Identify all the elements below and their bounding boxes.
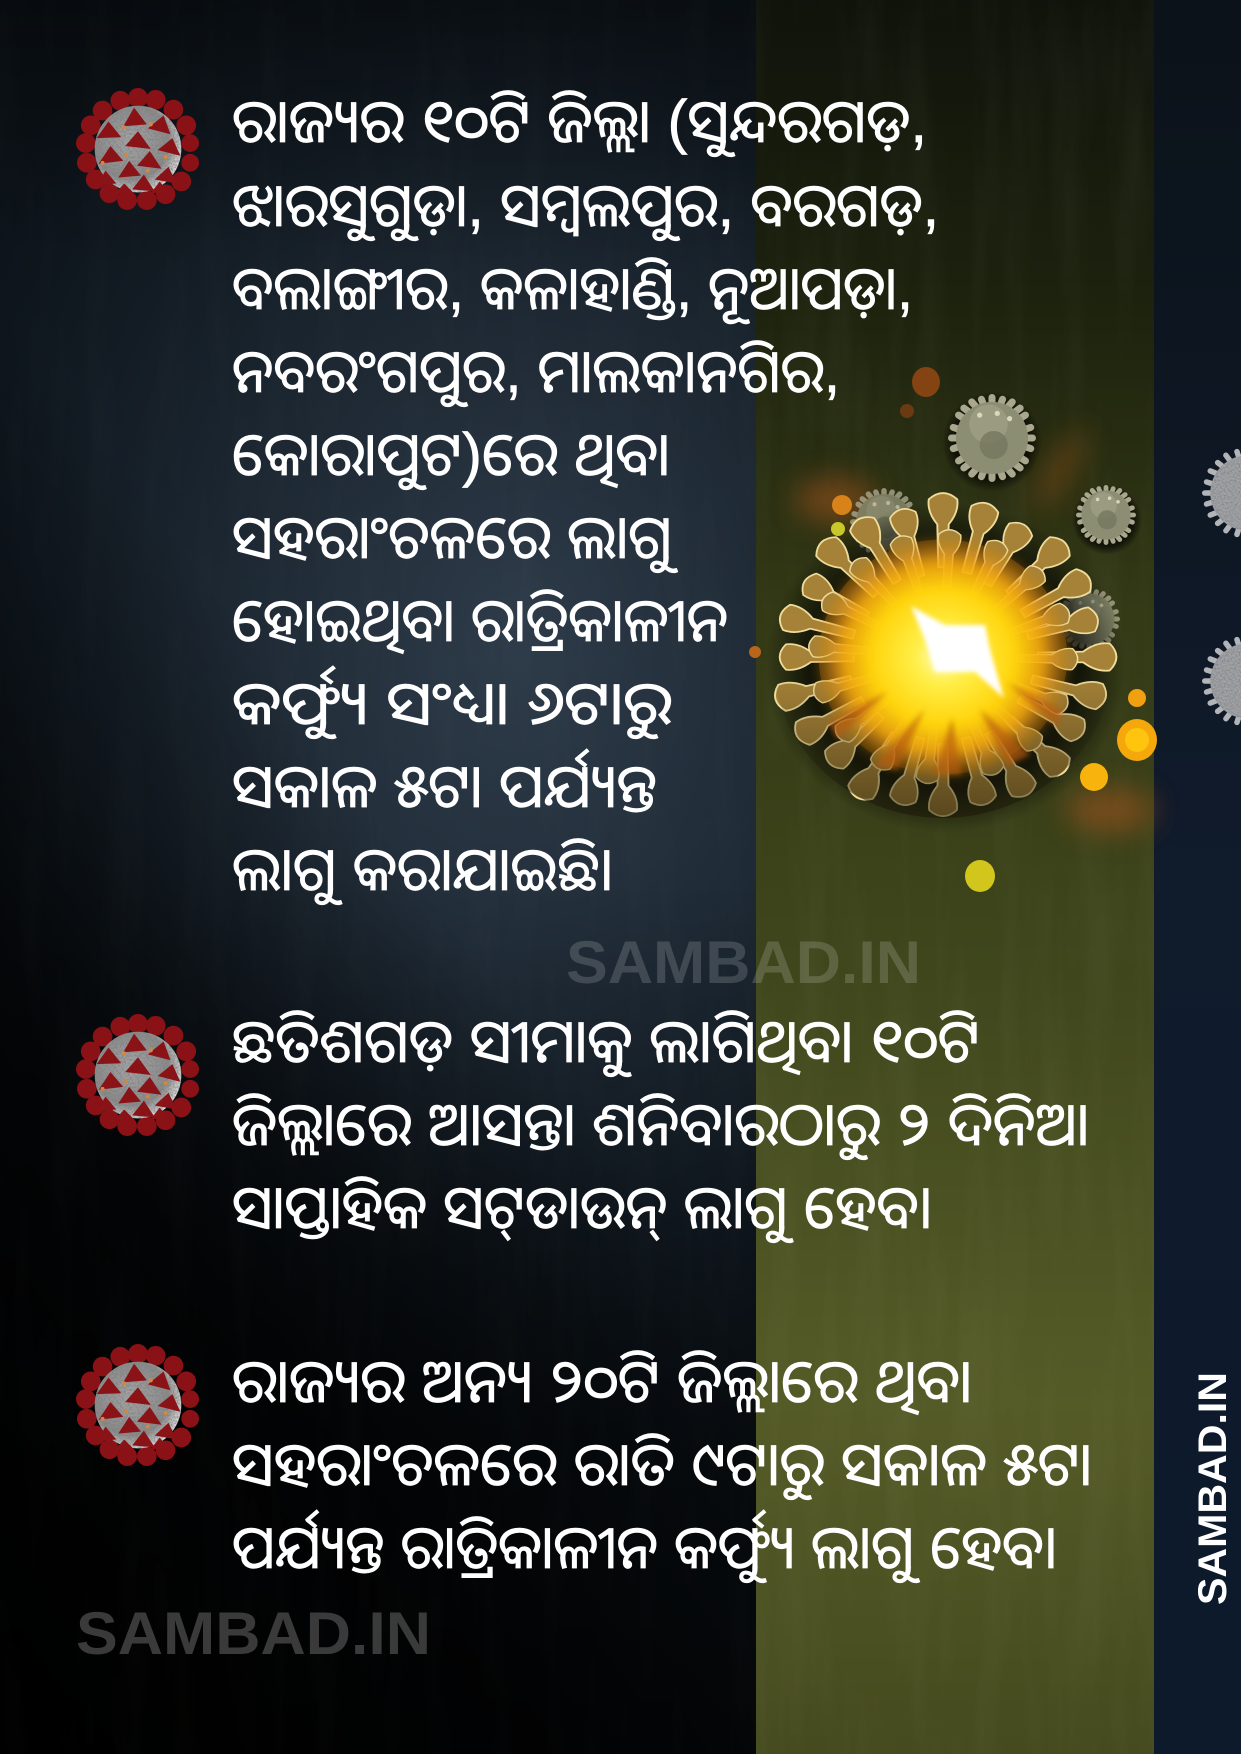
- gray virus upper right: [1205, 450, 1241, 536]
- paragraph: night curfew in other twenty districts: ପର୍ଯ୍ୟନ୍ତ ରାତ୍ରିକାଳୀନ କର୍ଫ୍ୟୁ ଲାଗୁ ହେବ।: [232, 1509, 1058, 1583]
- gray virus lower right: [1205, 638, 1241, 724]
- orange haze: [795, 424, 1154, 832]
- icon: coronavirus bullet 2: [76, 1014, 199, 1136]
- paragraph: night curfew in ten districts: ନବରଂଗପୁର, ମାଲକାନଗିର,: [232, 338, 840, 407]
- paragraph: night curfew in other twenty districts: ରାଜ୍ୟର ଅନ୍ୟ ୨୦ଟି ଜିଲ୍ଲାରେ ଥିବା: [232, 1348, 972, 1415]
- paragraph: weekend shutdown: ଜିଲ୍ଲାରେ ଆସନ୍ତା ଶନିବାରଠାରୁ ୨ ଦିନିଆ: [232, 1091, 1089, 1160]
- watermark: bottom left: SAMBAD.IN: [76, 1600, 431, 1667]
- paragraph: night curfew in ten districts: ବଲାଙ୍ଗୀର, କଳାହାଣ୍ଡି, ନୂଆପଡ଼ା,: [232, 255, 913, 324]
- virus behind right: [1060, 590, 1118, 648]
- green vertical panel: [756, 0, 1154, 1754]
- paragraph: night curfew in ten districts: ହୋଇଥିବା ରାତ୍ରିକାଳୀନ: [232, 587, 728, 654]
- watermark: centre: SAMBAD.IN: [566, 929, 921, 996]
- virus behind left: [853, 491, 915, 553]
- main virus: [765, 493, 1125, 833]
- icon: coronavirus bullet 1: [76, 88, 199, 210]
- paragraph: night curfew in other twenty districts: ସହରାଂଚଳରେ ରାତି ୯ଟାରୁ ସକାଳ ୫ଟା: [232, 1431, 1092, 1500]
- paragraph: weekend shutdown: ସାପ୍ତାହିକ ସଟ୍‌ଡାଉନ୍ ଲାଗୁ ହେବ।: [232, 1174, 933, 1243]
- pale virus small: [1072, 485, 1142, 555]
- illustration: exploding coronavirus: [749, 367, 1241, 892]
- icon: coronavirus bullet 3: [76, 1344, 199, 1466]
- paragraph: night curfew in ten districts: [232, 88, 939, 905]
- vertical brand label: SAMBAD.IN: [1191, 1372, 1235, 1605]
- paragraph: night curfew in other twenty districts: [232, 1348, 1092, 1583]
- paragraph: night curfew in ten districts: କୋରାପୁଟ)ରେ ଥିବା: [232, 421, 670, 490]
- right navy strip: [1154, 0, 1241, 1754]
- glowing sparks: [749, 367, 1157, 892]
- paragraph: weekend shutdown: [232, 1008, 1089, 1243]
- paragraph: night curfew in ten districts: ଲାଗୁ କରାଯାଇଛି।: [232, 836, 614, 905]
- paragraph: night curfew in ten districts: ଝାରସୁଗୁଡ଼ା, ସମ୍ବଲପୁର, ବରଗଡ଼,: [232, 172, 939, 241]
- paragraph: night curfew in ten districts: ରାଜ୍ୟର ୧୦ଟି ଜିଲ୍ଲା (ସୁନ୍ଦରଗଡ଼,: [232, 88, 927, 157]
- pale virus upper: [942, 392, 1042, 492]
- paragraph: weekend shutdown: ଛତିଶଗଡ଼ ସୀମାକୁ ଲାଗିଥିବା ୧୦ଟି: [232, 1008, 980, 1077]
- paragraph: night curfew in ten districts: କର୍ଫ୍ୟୁ ସଂଧ୍ୟା ୬ଟାରୁ: [232, 665, 672, 739]
- paragraph: night curfew in ten districts: ସହରାଂଚଳରେ ଲାଗୁ: [232, 504, 678, 573]
- paragraph: night curfew in ten districts: ସକାଳ ୫ଟା ପର୍ଯ୍ୟନ୍ତ: [232, 748, 657, 820]
